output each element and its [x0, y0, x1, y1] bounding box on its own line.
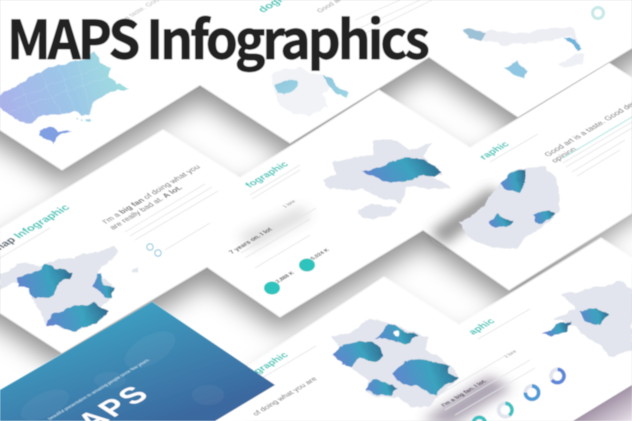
icon: bullet two [155, 250, 161, 256]
heading: right slide: raphic [477, 140, 513, 162]
cover tagline: beautiful presentation to amazing people since few years. [47, 358, 151, 421]
main title: MAPS Infographics [7, 0, 429, 75]
map: central slide [323, 140, 451, 220]
map shape: highlighted region [361, 158, 441, 182]
text: right slide intro line two: opinion. [549, 145, 581, 164]
donut charts [473, 369, 564, 421]
donut: indigo [551, 369, 564, 383]
map shape: north region [17, 263, 73, 299]
map shape: centre region [579, 308, 609, 325]
map shape: Sicily [559, 53, 586, 68]
map shape: left region [333, 342, 384, 367]
shadow: central slide over right slide [430, 188, 505, 245]
map: Spain [0, 247, 138, 332]
text: central slide lorem: 1 lore [282, 199, 298, 209]
map shape: mainland [466, 28, 579, 45]
map shape: grey country [554, 282, 632, 357]
map shape: teal region [464, 30, 486, 40]
map: bottom centre slide [329, 318, 459, 407]
map shape: south region [45, 302, 108, 332]
map shape: grey regions [323, 140, 451, 203]
icon: teal stat circle two [299, 258, 315, 272]
map shape: lake [392, 332, 400, 337]
shadow: stats block on bottom right slide [422, 376, 512, 421]
map shape: teal region [275, 80, 298, 95]
map shape: grey country [0, 247, 117, 332]
text: central slide stats heading: 7 years on. I lot [228, 227, 275, 255]
map shape: blue region [564, 38, 583, 52]
map shape: Sardinia [506, 62, 528, 78]
map: top centre slide [270, 67, 328, 115]
map shape: left region [543, 322, 571, 337]
map shape: region two [489, 213, 513, 228]
icon: teal stat circle one [264, 282, 280, 294]
donut chart: top right slide [592, 8, 604, 18]
heading: central slide: fographic [243, 160, 292, 190]
text: Spain slide intro line one: I'm a big fan of doing what you [100, 163, 202, 225]
heading: bottom centre slide: graphic [251, 351, 292, 376]
slide background [0, 302, 275, 421]
map shape: Balearic islands [130, 267, 138, 273]
icon bullets on Spain slide [147, 244, 161, 256]
map shape: region three [533, 210, 556, 223]
text: bottom centre slide intro: of doing what you are [250, 375, 319, 417]
map shape: east region [93, 273, 115, 298]
map: USA [0, 50, 131, 144]
shadow: stats block on central slide [238, 207, 312, 248]
shadow: corner band at bottom right [573, 385, 632, 421]
map: top centre slide, right part [296, 75, 349, 97]
map shape: grey country [329, 318, 459, 407]
map shape: region one [501, 170, 526, 192]
map shape: island [358, 204, 396, 220]
donut: teal [499, 403, 512, 417]
text: stat value two: 5,024 K [310, 248, 331, 261]
world map texture [16, 324, 224, 421]
donut: teal partial [473, 417, 485, 421]
map shape: right region [393, 360, 459, 395]
map shape: top region [374, 323, 418, 343]
map shape: pale country [270, 67, 328, 115]
map shape: Hawaii [76, 117, 91, 122]
text: stat value one: 2,888 K [275, 271, 296, 284]
icon: bullet one [147, 244, 153, 250]
map shape: contiguous states [0, 50, 131, 123]
map: right slide [459, 166, 560, 249]
map shape: Alaska [38, 127, 73, 144]
text: Spain slide intro line two: are really bad at. A lot. [107, 184, 185, 231]
map shape: blue region [323, 75, 349, 97]
map shape: lower region [366, 378, 398, 395]
map shape: grey country [459, 166, 560, 249]
heading: bottom right slide: aphic [466, 317, 498, 337]
slide headings in teal [0, 0, 513, 376]
map shape: grey region [296, 75, 329, 97]
map: Italy [464, 28, 586, 78]
panel: bottom white slides [200, 238, 632, 421]
text: bottom right stats heading: I'm a big fan. I lot. [441, 379, 489, 408]
panel: blue cover slide [0, 302, 275, 421]
text: bottom right lorem: 1 lore [503, 349, 519, 359]
teal subtitle line on right slide [563, 117, 632, 158]
icon circles on central slide stats [264, 258, 315, 294]
donut: mid blue [525, 386, 539, 399]
map: bottom right slide [543, 282, 632, 357]
panel: top row of white slides [0, 0, 632, 170]
panel: central white slides [0, 63, 632, 353]
